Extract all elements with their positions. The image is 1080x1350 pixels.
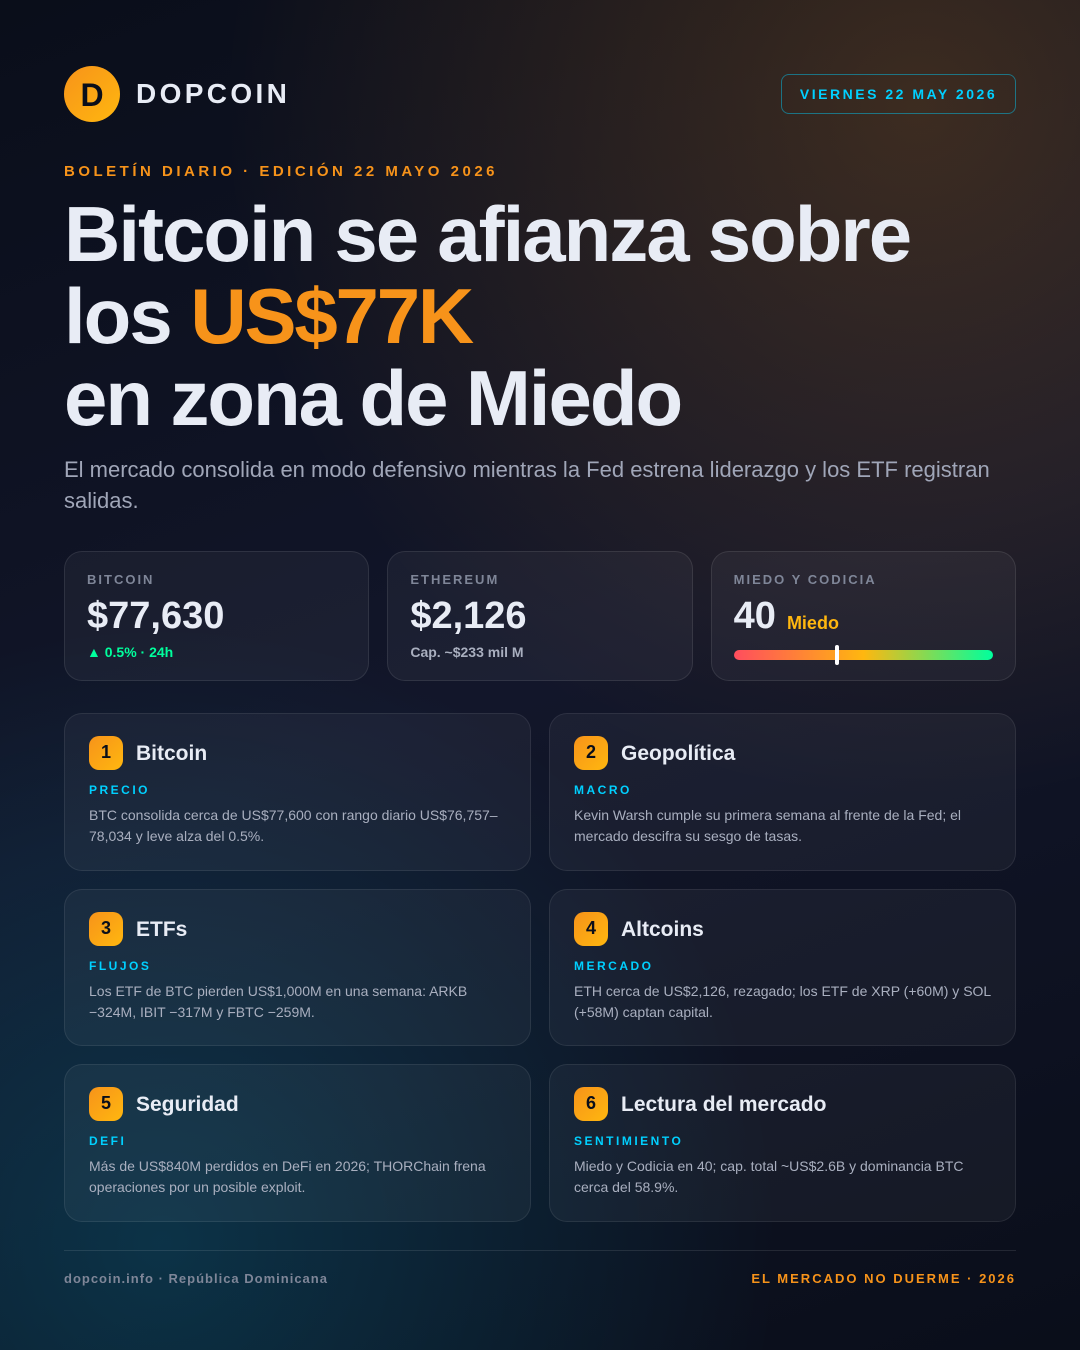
- card 1: [64, 713, 531, 871]
- card 1: BTC consolida cerca de US$77,600 con rango diario US$76,757–78,034 y leve alza del 0.5%.: [89, 807, 498, 844]
- logo: [64, 66, 290, 122]
- subtitle: El mercado consolida en modo defensivo mientras la Fed estrena liderazgo y los ETF registran salidas.: [64, 457, 990, 513]
- card 5: DEFI: [89, 1134, 126, 1148]
- card 4: ETH cerca de US$2,126, rezagado; los ETF de XRP (+60M) y SOL (+58M) captan capital.: [574, 983, 991, 1020]
- stat: ethereum: [387, 551, 693, 681]
- card 4: MERCADO: [574, 959, 654, 973]
- card 2: MACRO: [574, 783, 632, 797]
- stat: bitcoin: ▲ 0.5% · 24h: [87, 644, 173, 660]
- card 3: 3: [101, 918, 111, 938]
- stat: fear and greed: [711, 551, 1016, 681]
- footer right: EL MERCADO NO DUERME · 2026: [751, 1271, 1016, 1286]
- card 5: Más de US$840M perdidos en DeFi en 2026; THORChain frena operaciones por un posible exploit.: [89, 1158, 486, 1195]
- card 1: PRECIO: [89, 783, 150, 797]
- brand name: DOPCOIN: [136, 78, 290, 109]
- stat: ethereum: Cap. ~$233 mil M: [410, 644, 524, 660]
- card 6: 6: [586, 1093, 596, 1113]
- card 2: 2: [586, 742, 596, 762]
- card 3: [64, 889, 531, 1046]
- title: [64, 190, 910, 442]
- date badge: [781, 74, 1016, 114]
- card 6: Miedo y Codicia en 40; cap. total ~US$2.6B y dominancia BTC cerca del 58.9%.: [574, 1158, 963, 1195]
- stat: bitcoin: BITCOIN: [87, 572, 154, 587]
- icon: logo coin: [64, 66, 120, 122]
- eyebrow: BOLETÍN DIARIO · EDICIÓN 22 MAYO 2026: [64, 163, 498, 180]
- icon: logo coin: D: [80, 77, 104, 113]
- stat: fear and greed: MIEDO Y CODICIA: [734, 572, 877, 587]
- gauge marker: [835, 645, 839, 665]
- card 4: [549, 889, 1016, 1046]
- card 5: 5: [101, 1093, 111, 1113]
- card 4: 4: [586, 918, 596, 938]
- stat: bitcoin: [64, 551, 369, 681]
- card 6: [549, 1064, 1016, 1222]
- card 2: [549, 713, 1016, 871]
- card 3: ETFs: [136, 918, 187, 941]
- card 4: Altcoins: [621, 918, 704, 941]
- card 1: 1: [101, 742, 111, 762]
- card 3: FLUJOS: [89, 959, 151, 973]
- title: en zona de Miedo: [64, 354, 681, 442]
- card 1: Bitcoin: [136, 742, 207, 765]
- card 6: SENTIMIENTO: [574, 1134, 683, 1148]
- stat: bitcoin: $77,630: [87, 595, 224, 637]
- footer left: dopcoin.info · República Dominicana: [64, 1271, 328, 1286]
- date badge: VIERNES 22 MAY 2026: [800, 86, 997, 102]
- card 5: Seguridad: [136, 1093, 239, 1116]
- stat: fear and greed: 40 Miedo: [734, 595, 839, 637]
- card 5: [64, 1064, 531, 1222]
- gauge bar: [734, 650, 993, 660]
- card 2: Kevin Warsh cumple su primera semana al frente de la Fed; el mercado descifra su sesgo de tasas.: [574, 807, 961, 844]
- card 3: Los ETF de BTC pierden US$1,000M en una semana: ARKB −324M, IBIT −317M y FBTC −259M.: [89, 983, 467, 1020]
- title: Bitcoin se afianza sobre: [64, 190, 910, 278]
- title: los US$77K: [64, 272, 472, 360]
- stat: ethereum: ETHEREUM: [410, 572, 499, 587]
- stat: ethereum: $2,126: [410, 595, 527, 637]
- card 2: Geopolítica: [621, 742, 735, 765]
- card 6: Lectura del mercado: [621, 1093, 826, 1116]
